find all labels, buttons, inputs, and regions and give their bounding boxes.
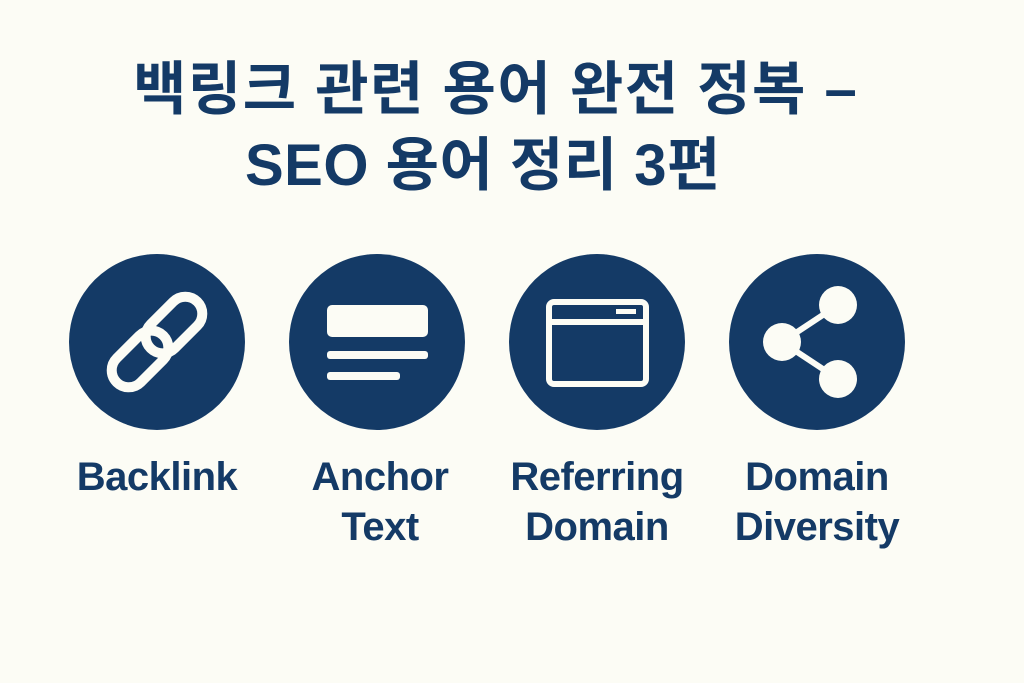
label: Domain Diversity: Diversity — [735, 505, 899, 549]
label: Anchor Text: Anchor — [312, 455, 448, 499]
label: Referring Domain: Referring — [510, 455, 684, 499]
label: Anchor Text — [312, 455, 448, 549]
label: Backlink: Backlink — [77, 455, 237, 499]
label: Referring Domain — [510, 455, 684, 549]
icon: browser window — [509, 254, 685, 430]
title — [133, 57, 858, 198]
label: Referring Domain: Domain — [525, 505, 669, 549]
title line 1: 백링크 관련 용어 완전 정복 – — [133, 57, 858, 122]
label: Domain Diversity — [735, 455, 900, 549]
label: Anchor Text: Text — [341, 505, 419, 549]
label: Domain Diversity: Domain — [745, 455, 889, 499]
title line 2: SEO 용어 정리 3편 — [245, 133, 721, 198]
icon: link — [69, 254, 245, 430]
icon: anchor text — [289, 254, 465, 430]
icon: share — [729, 254, 905, 430]
